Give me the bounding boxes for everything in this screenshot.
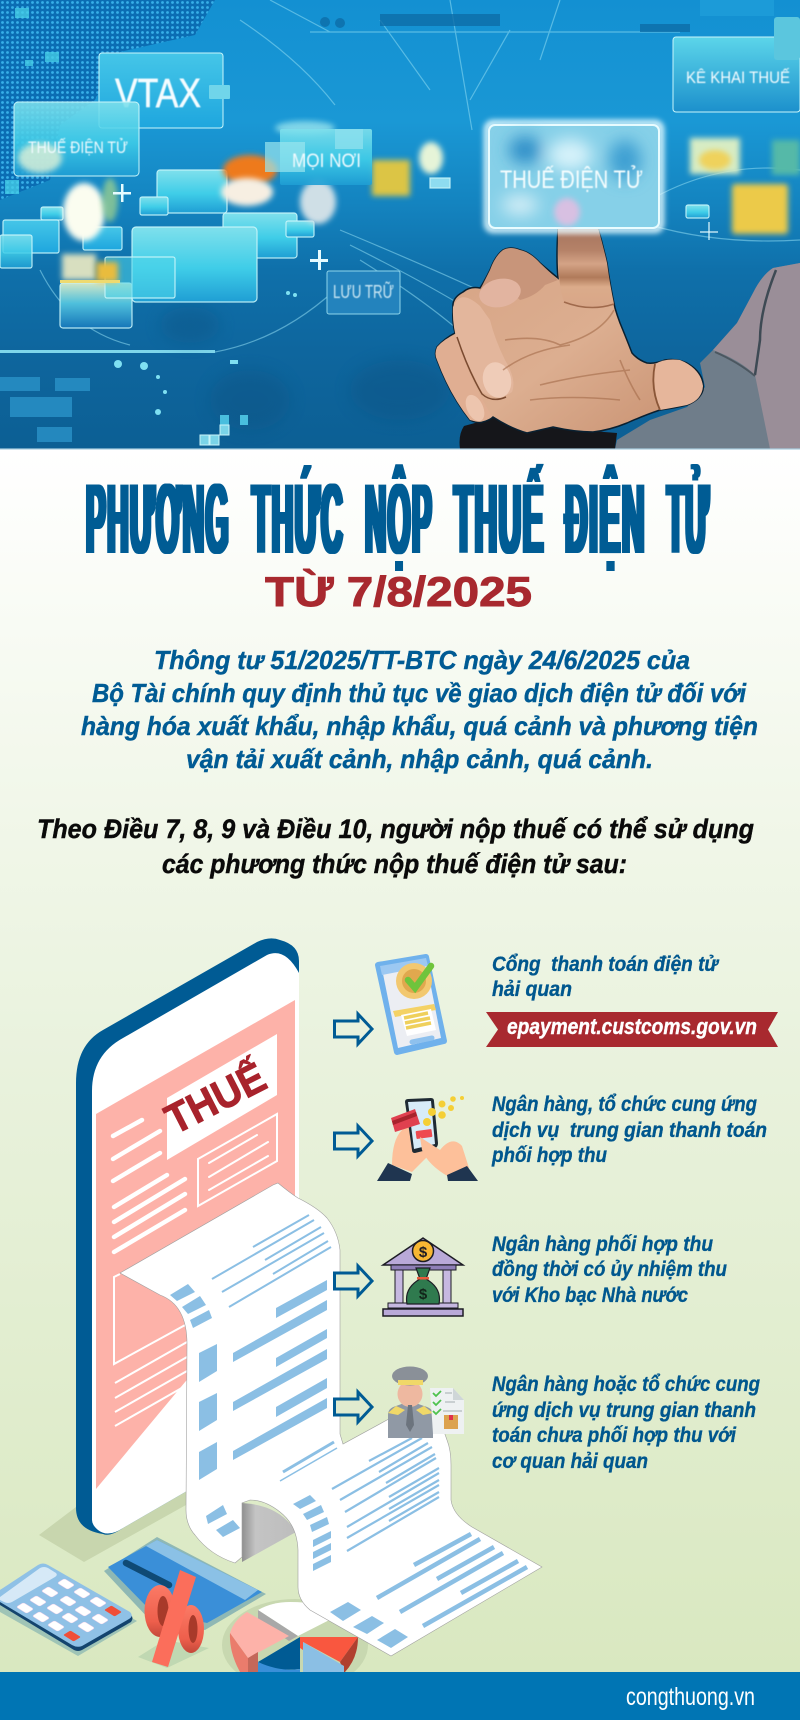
panel: Thuế điện tử, main — [487, 123, 661, 230]
plus signs — [113, 184, 718, 270]
item 2 text: phối hợp thu — [491, 1143, 607, 1167]
item 4 text: toán chưa phối hợp thu với — [492, 1423, 737, 1447]
jacket sleeve — [615, 263, 800, 449]
panel: Mọi nơi — [265, 121, 372, 185]
title: THUẾ — [454, 463, 545, 574]
thumb — [654, 360, 703, 410]
item 3 text: với Kho bạc Nhà nước — [492, 1283, 688, 1307]
pink document screen — [96, 1000, 295, 1489]
subtitle: date: TỪ 7/8/2025 — [265, 567, 532, 615]
index finger — [558, 228, 614, 308]
banner: portal address: epayment.custcoms.gov.vn — [507, 1014, 757, 1039]
item 4 text: Ngân hàng hoặc tổ chức cung — [492, 1372, 760, 1396]
item 4 text: ứng dịch vụ trung gian thanh — [492, 1398, 756, 1422]
little finger — [436, 335, 492, 421]
footer bar — [0, 1672, 800, 1720]
panel: Mọi nơi: MỌI NƠI — [292, 151, 361, 172]
panel: Kê khai thuế — [673, 17, 800, 112]
arrow 3 — [334, 1266, 372, 1296]
middle finger — [480, 248, 558, 300]
arrow 4 — [334, 1392, 372, 1422]
lead-in sentence — [37, 814, 754, 879]
intro paragraph: Thông tư 51/2025/TT-BTC ngày 24/6/2025 của — [154, 645, 690, 675]
intro paragraph: vận tải xuất cảnh, nhập cảnh, quá cảnh. — [186, 744, 653, 774]
item 1 text: hải quan — [492, 977, 572, 1001]
illustration: pie chart — [222, 1599, 368, 1691]
illustration: receipt paper — [120, 1183, 542, 1656]
item 4 text: cơ quan hải quan — [492, 1449, 648, 1473]
title: THỨC — [252, 463, 344, 574]
THUẾ label: THUẾ — [158, 1053, 273, 1143]
panel: Lưu trữ: LƯU TRỮ — [333, 281, 394, 302]
panel: Thuế điện tử, main: THUẾ ĐIỆN TỬ — [500, 164, 643, 194]
lead-in sentence: các phương thức nộp thuế điện tử sau: — [162, 849, 627, 879]
icon: customs officer with documents — [388, 1366, 464, 1438]
item 3 text: đồng thời có ủy nhiệm thu — [492, 1257, 727, 1281]
icon: hands paying by phone — [377, 1096, 478, 1181]
lead-in sentence: Theo Điều 7, 8, 9 và Điều 10, người nộp thuế có thể sử dụng — [37, 814, 754, 844]
bright horizontal line — [0, 350, 215, 353]
intro paragraph: hàng hóa xuất khẩu, nhập khẩu, quá cảnh và phương tiện — [81, 711, 758, 741]
banner: portal address — [486, 1012, 778, 1047]
icon: bank with money bag: $ — [419, 1286, 428, 1303]
arrow 2 — [334, 1126, 372, 1156]
item 2 text: Ngân hàng, tổ chức cung ứng — [492, 1092, 757, 1116]
item 1 text: Cổng thanh toán điện tử — [492, 952, 719, 976]
panel: Thuế điện tử, left — [14, 102, 139, 176]
title: NỘP — [365, 463, 433, 574]
icon: bank with money bag — [383, 1238, 463, 1316]
item 2 text — [491, 1092, 767, 1167]
illustration: percent sign — [138, 1570, 209, 1668]
intro paragraph: Bộ Tài chính quy định thủ tục về giao dịch điện tử đối với — [92, 678, 747, 708]
blurred colourful icons — [60, 138, 800, 283]
illustration: calculator — [0, 1564, 137, 1656]
icon: phone payment with check mark — [378, 957, 444, 1052]
item 2 text: dịch vụ trung gian thanh toán — [492, 1118, 767, 1142]
ring finger — [453, 297, 513, 397]
hero photo: digital tax interface and pointing hand — [0, 0, 800, 450]
footer bar: congthuong.vn — [626, 1683, 755, 1711]
illustration: credit card — [104, 1537, 266, 1630]
page background — [0, 450, 800, 1672]
background panels — [0, 170, 709, 328]
panel: Thuế điện tử, left: THUẾ ĐIỆN TỬ — [28, 138, 128, 157]
item 4 text — [492, 1372, 760, 1473]
panel: Lưu trữ — [327, 271, 400, 314]
icon: bank with money bag: $ — [419, 1244, 428, 1261]
panel: VTAX — [99, 53, 223, 128]
hand — [436, 228, 703, 433]
panel: VTAX: VTAX — [115, 70, 201, 116]
illustration: phone with tax document — [39, 938, 299, 1562]
item 3 text — [492, 1232, 727, 1307]
item 1 text — [492, 952, 719, 1001]
item 3 text: Ngân hàng phối hợp thu — [492, 1232, 713, 1256]
title: PHƯƠNG — [86, 463, 230, 574]
arrow 1 — [334, 1014, 372, 1044]
intro paragraph — [81, 645, 758, 774]
